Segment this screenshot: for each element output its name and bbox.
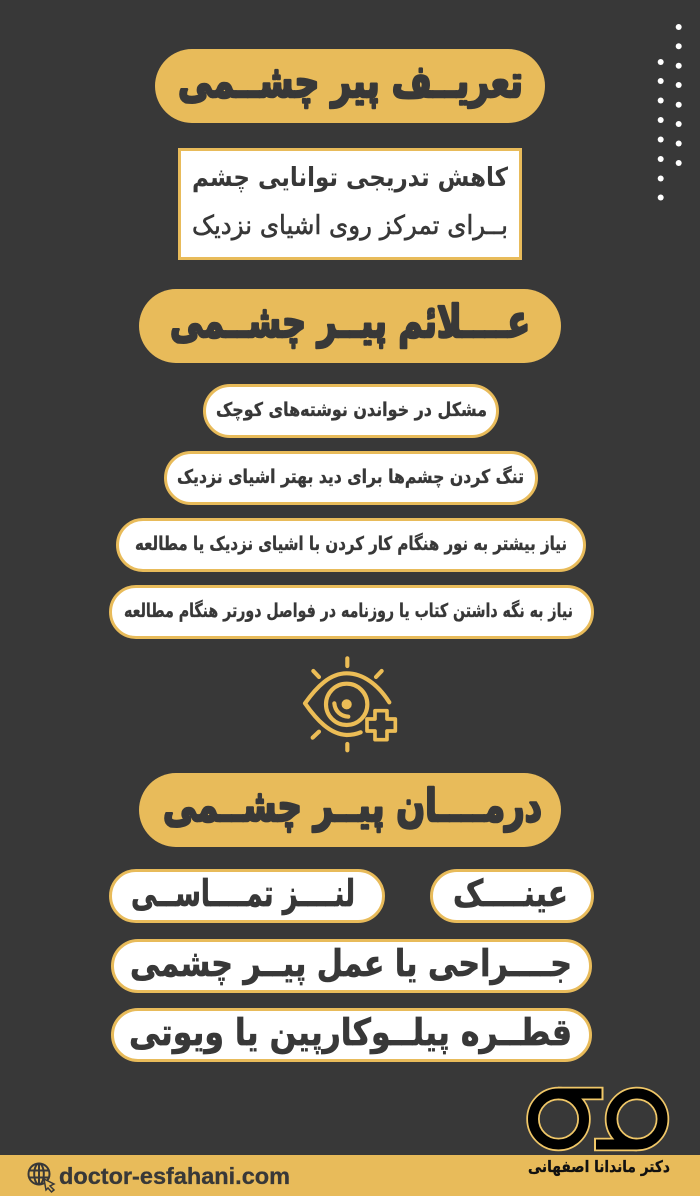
symptom 3: نیاز بیشتر به نور هنگام کار کردن با اشیای نزدیک یا مطالعه [135, 532, 567, 555]
heading: symptoms of presbyopia [139, 289, 561, 363]
symptom 2 [166, 452, 536, 504]
heading: treatment of presbyopia: درمــــان پیــر چشــمی [163, 779, 542, 832]
logo mark [533, 1094, 662, 1144]
symptom 4 [110, 586, 592, 638]
treatment: eye drops: قطــره پیلــوکارپین یا ویوتی [129, 1011, 572, 1054]
panel: symptoms list [110, 386, 592, 638]
treatment: contact lens [110, 870, 384, 922]
footer bar [0, 1155, 700, 1196]
treatment: contact lens: لنــــز تمــــاســی [131, 872, 355, 915]
logo name: دکتر ماندانا اصفهانی [528, 1157, 670, 1176]
treatment: glasses: عینــــک [453, 872, 568, 915]
symptom 1 [204, 386, 498, 436]
symptom 2: تنگ کردن چشم‌ها برای دید بهتر اشیای نزدیک [177, 465, 524, 488]
heading: definition of presbyopia [155, 49, 545, 123]
panel: definition text: بــرای تمرکز روی اشیای نزدیک [192, 211, 508, 241]
website url: doctor-esfahani.com [59, 1163, 290, 1189]
heading: definition of presbyopia: تعریــف پیر چشــمی [178, 55, 523, 108]
panel: definition text: کاهش تدریجی توانایی چشم [192, 163, 509, 193]
symptom 1: مشکل در خواندن نوشته‌های کوچک [216, 399, 487, 421]
symptom 3 [118, 520, 584, 570]
treatment: surgery: جــــراحی یا عمل پیــر چشمی [130, 942, 572, 985]
heading: treatment of presbyopia [139, 773, 561, 847]
panel: definition text [180, 150, 520, 258]
icon: globe with cursor [28, 1164, 54, 1192]
icon: eye with plus [305, 658, 395, 750]
panel: treatments list [110, 870, 592, 1060]
heading: symptoms of presbyopia: عــــلائم پیــر چشــمی [170, 295, 530, 348]
